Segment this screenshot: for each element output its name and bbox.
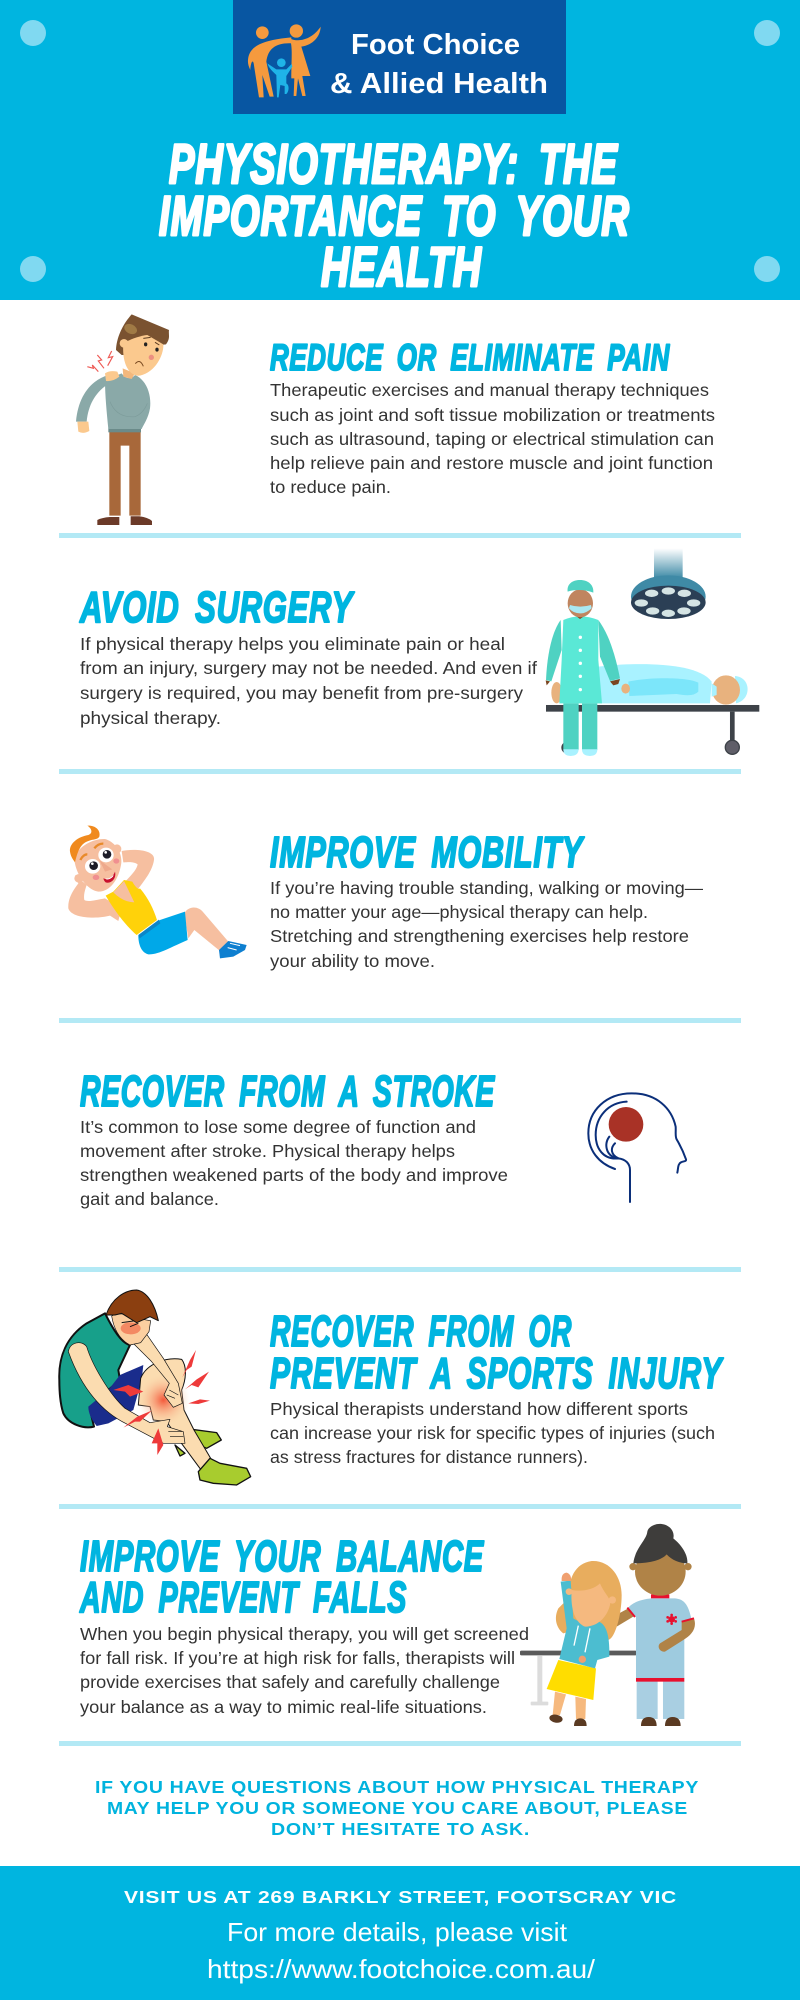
body text — [270, 1399, 715, 1467]
body text: Therapeutic exercises and manual therapy techniques — [270, 380, 709, 400]
icon: injured athlete — [59, 1290, 251, 1485]
body text — [270, 878, 703, 971]
body text — [80, 1117, 508, 1209]
address: VISIT US AT 269 BARKLY STREET, FOOTSCRAY VIC — [124, 1887, 677, 1907]
body text: Stretching and strengthening exercises help restore — [270, 926, 689, 946]
body text — [80, 1624, 529, 1717]
divider — [59, 769, 741, 774]
website text — [207, 1917, 596, 1984]
body text: physical therapy. — [80, 708, 221, 728]
body text — [270, 380, 715, 497]
body text: strengthen weakened parts of the body and improve — [80, 1165, 508, 1185]
heading: AVOID SURGERY — [79, 583, 355, 632]
call to action text: DON’T HESITATE TO ASK. — [271, 1819, 530, 1839]
body text: from an injury, surgery may not be needed. And even if — [80, 658, 537, 678]
heading: IMPROVE MOBILITY — [270, 828, 585, 877]
body text: such as ultrasound, taping or electrical stimulation can — [270, 429, 714, 449]
body text: such as joint and soft tissue mobilization or treatments — [270, 405, 715, 425]
body text: can increase your risk for specific types of injuries (such — [270, 1423, 715, 1443]
icon: man doing sit-ups — [68, 826, 247, 958]
heading: IMPROVE YOUR BALANCE — [80, 1532, 484, 1581]
body text: no matter your age—physical therapy can help. — [270, 902, 648, 922]
website text: For more details, please visit — [227, 1917, 568, 1947]
heading: AND PREVENT FALLS — [79, 1573, 407, 1622]
body text: your ability to move. — [270, 951, 435, 971]
body text: If physical therapy helps you eliminate pain or heal — [80, 634, 505, 654]
website text: https://www.footchoice.com.au/ — [207, 1954, 596, 1984]
section: reduce or eliminate pain — [76, 314, 715, 525]
icon: therapist and patient — [520, 1524, 695, 1726]
icon: man with neck pain — [76, 314, 169, 525]
body text: If you’re having trouble standing, walking or moving— — [270, 878, 703, 898]
heading — [270, 1307, 724, 1398]
body text: When you begin physical therapy, you will get screened — [80, 1624, 529, 1644]
body text: your balance as a way to mimic real-life situations. — [80, 1697, 487, 1717]
title: HEALTH — [321, 235, 482, 298]
body text: for fall risk. If you’re at high risk for falls, therapists will — [80, 1648, 515, 1668]
title — [159, 132, 630, 298]
body text: help relieve pain and restore muscle and joint function — [270, 453, 713, 473]
divider — [59, 1504, 741, 1509]
section: recover from a stroke — [80, 1067, 686, 1209]
logo icon: family — [248, 24, 321, 97]
divider — [59, 1267, 741, 1272]
divider — [59, 1018, 741, 1023]
footer panel — [0, 1866, 800, 2000]
section: improve balance — [79, 1524, 695, 1726]
section: improve mobility — [68, 826, 703, 971]
logo text: Foot Choice — [351, 29, 520, 61]
call to action text — [95, 1777, 699, 1839]
body text: to reduce pain. — [270, 477, 391, 497]
body text: surgery is required, you may benefit from pre-surgery — [80, 683, 523, 703]
call to action text: MAY HELP YOU OR SOMEONE YOU CARE ABOUT, PLEASE — [107, 1798, 688, 1818]
logo — [233, 0, 566, 114]
header panel — [0, 0, 800, 300]
body text: Physical therapists understand how different sports — [270, 1399, 688, 1419]
icon: surgeon and patient — [546, 548, 759, 756]
body text — [80, 634, 537, 728]
body text: gait and balance. — [80, 1189, 219, 1209]
call to action text: IF YOU HAVE QUESTIONS ABOUT HOW PHYSICAL THERAPY — [95, 1777, 699, 1797]
body text: It’s common to lose some degree of function and — [80, 1117, 476, 1137]
divider — [59, 1741, 741, 1746]
logo text: & Allied Health — [330, 68, 548, 100]
section: sports injury — [59, 1290, 724, 1485]
body text: movement after stroke. Physical therapy helps — [80, 1141, 455, 1161]
heading: RECOVER FROM OR — [270, 1307, 572, 1356]
logo text — [330, 29, 548, 100]
heading: RECOVER FROM A STROKE — [80, 1067, 495, 1116]
body text: as stress fractures for distance runners). — [270, 1447, 588, 1467]
decorative corner dots — [20, 20, 780, 282]
section: avoid surgery — [79, 548, 759, 756]
icon: head with stroke — [588, 1093, 686, 1202]
heading — [79, 1532, 484, 1622]
divider — [59, 533, 741, 538]
body text: provide exercises that safely and carefully challenge — [80, 1672, 500, 1692]
